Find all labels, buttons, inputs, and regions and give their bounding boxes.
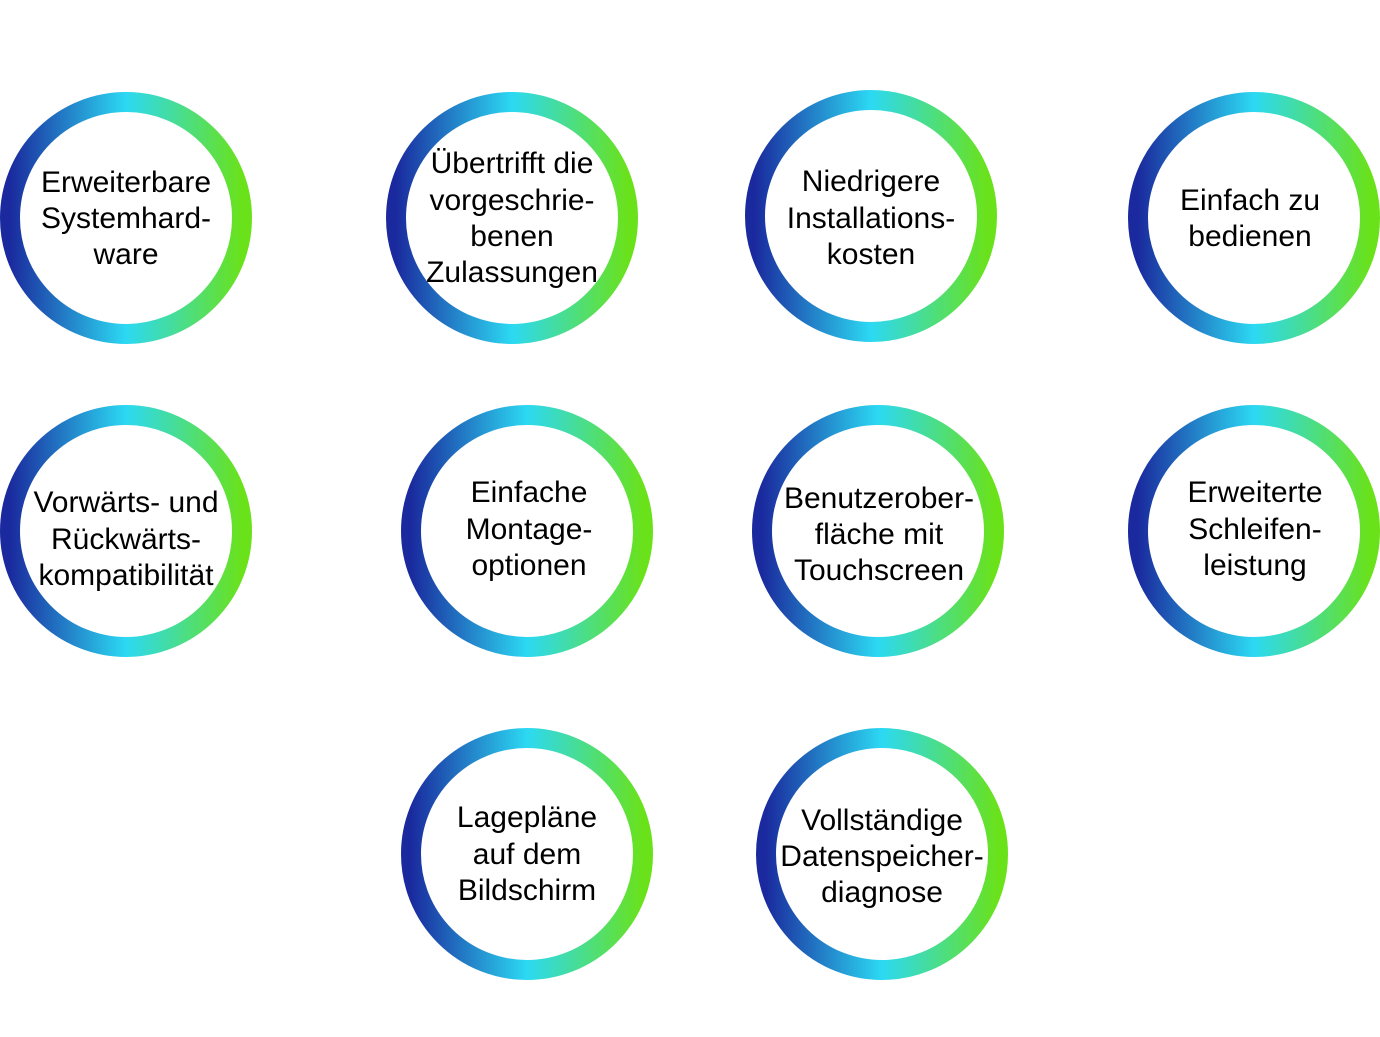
circle: Einfache Montageoptionen: Montage-	[466, 513, 592, 546]
circle: Erweiterbare Systemhardware: ware	[92, 238, 159, 271]
circle: Niedrigere Installationskosten: kosten	[827, 238, 915, 271]
circle: Einfach zu bedienen: bedienen	[1188, 220, 1312, 253]
circle: Übertrifft die vorgeschriebenen Zulassungen: benen	[470, 220, 554, 253]
circle: Einfache Montageoptionen: Einfache	[471, 476, 587, 509]
circle: Niedrigere Installationskosten	[755, 100, 987, 332]
circle: Vorwärts- und Rückwärtskompatibilität: Vorwärts- und	[33, 486, 219, 519]
circle: Benutzeroberfläche mit Touchscreen: Benutzerober-	[784, 482, 974, 515]
circle: Einfache Montageoptionen: optionen	[471, 549, 587, 582]
circle: Niedrigere Installationskosten: Installations-	[787, 202, 955, 235]
circle: Erweiterte Schleifenleistung: Erweiterte	[1187, 476, 1323, 509]
circle: Benutzeroberfläche mit Touchscreen: fläche mit	[815, 518, 944, 551]
circle: Übertrifft die vorgeschriebenen Zulassungen	[396, 102, 628, 334]
circle: Erweiterte Schleifenleistung: Schleifen-	[1188, 513, 1322, 546]
circle: Vollständige Datenspeicherdiagnose	[766, 738, 998, 970]
circle: Vorwärts- und Rückwärtskompatibilität	[10, 415, 242, 647]
circle: Einfach zu bedienen: Einfach zu	[1180, 184, 1320, 217]
circle: Erweiterte Schleifenleistung	[1138, 415, 1370, 647]
circle: Lagepläne auf dem Bildschirm: Lagepläne	[457, 801, 597, 834]
circle: Niedrigere Installationskosten: Niedrigere	[802, 165, 940, 198]
circle: Lagepläne auf dem Bildschirm	[411, 738, 643, 970]
circle: Einfach zu bedienen	[1138, 102, 1370, 334]
circle: Lagepläne auf dem Bildschirm: Bildschirm	[458, 874, 596, 907]
circle: Vorwärts- und Rückwärtskompatibilität: kompatibilität	[38, 559, 214, 592]
circle: Benutzeroberfläche mit Touchscreen: Touchscreen	[794, 554, 964, 587]
circle: Erweiterte Schleifenleistung: leistung	[1203, 549, 1307, 582]
circle: Erweiterbare Systemhardware	[10, 102, 242, 334]
circle: Einfache Montageoptionen	[411, 415, 643, 647]
circle: Übertrifft die vorgeschriebenen Zulassungen: Übertrifft die	[431, 147, 593, 180]
circle: Erweiterbare Systemhardware: Erweiterbare	[41, 166, 211, 199]
circle: Lagepläne auf dem Bildschirm: auf dem	[473, 838, 581, 871]
circle: Vollständige Datenspeicherdiagnose: diagnose	[821, 876, 943, 909]
circle: Vollständige Datenspeicherdiagnose: Datenspeicher-	[780, 840, 984, 873]
circle: Benutzeroberfläche mit Touchscreen	[762, 415, 994, 647]
circle: Übertrifft die vorgeschriebenen Zulassungen: vorgeschrie-	[429, 184, 595, 217]
circle: Erweiterbare Systemhardware: Systemhard-	[41, 202, 211, 235]
circle: Vollständige Datenspeicherdiagnose: Vollständige	[801, 804, 963, 837]
circle: Übertrifft die vorgeschriebenen Zulassungen: Zulassungen	[426, 256, 598, 289]
circle: Vorwärts- und Rückwärtskompatibilität: Rückwärts-	[51, 523, 201, 556]
